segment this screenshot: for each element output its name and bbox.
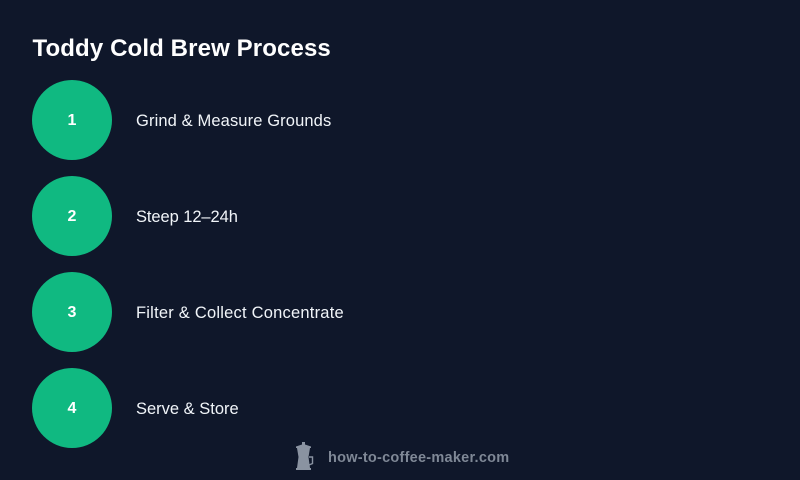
step 4 label: Serve & Store [136,400,239,418]
step 3 label: Filter & Collect Concentrate [136,304,344,322]
step 4 badge: 4 [68,400,76,417]
step 1 badge [32,80,112,160]
step 3 badge [32,272,112,352]
title: Toddy Cold Brew Process [32,35,331,62]
step 4 badge [32,368,112,448]
step 1 badge: 1 [68,112,76,129]
icon: moka pot [296,442,314,470]
step 1 label: Grind & Measure Grounds [136,112,331,130]
step 2 badge [32,176,112,256]
step 3 badge: 3 [68,304,76,321]
step 2 label: Steep 12–24h [136,208,238,226]
footer website text: how-to-coffee-maker.com [328,450,509,466]
step 2 badge: 2 [68,208,76,225]
